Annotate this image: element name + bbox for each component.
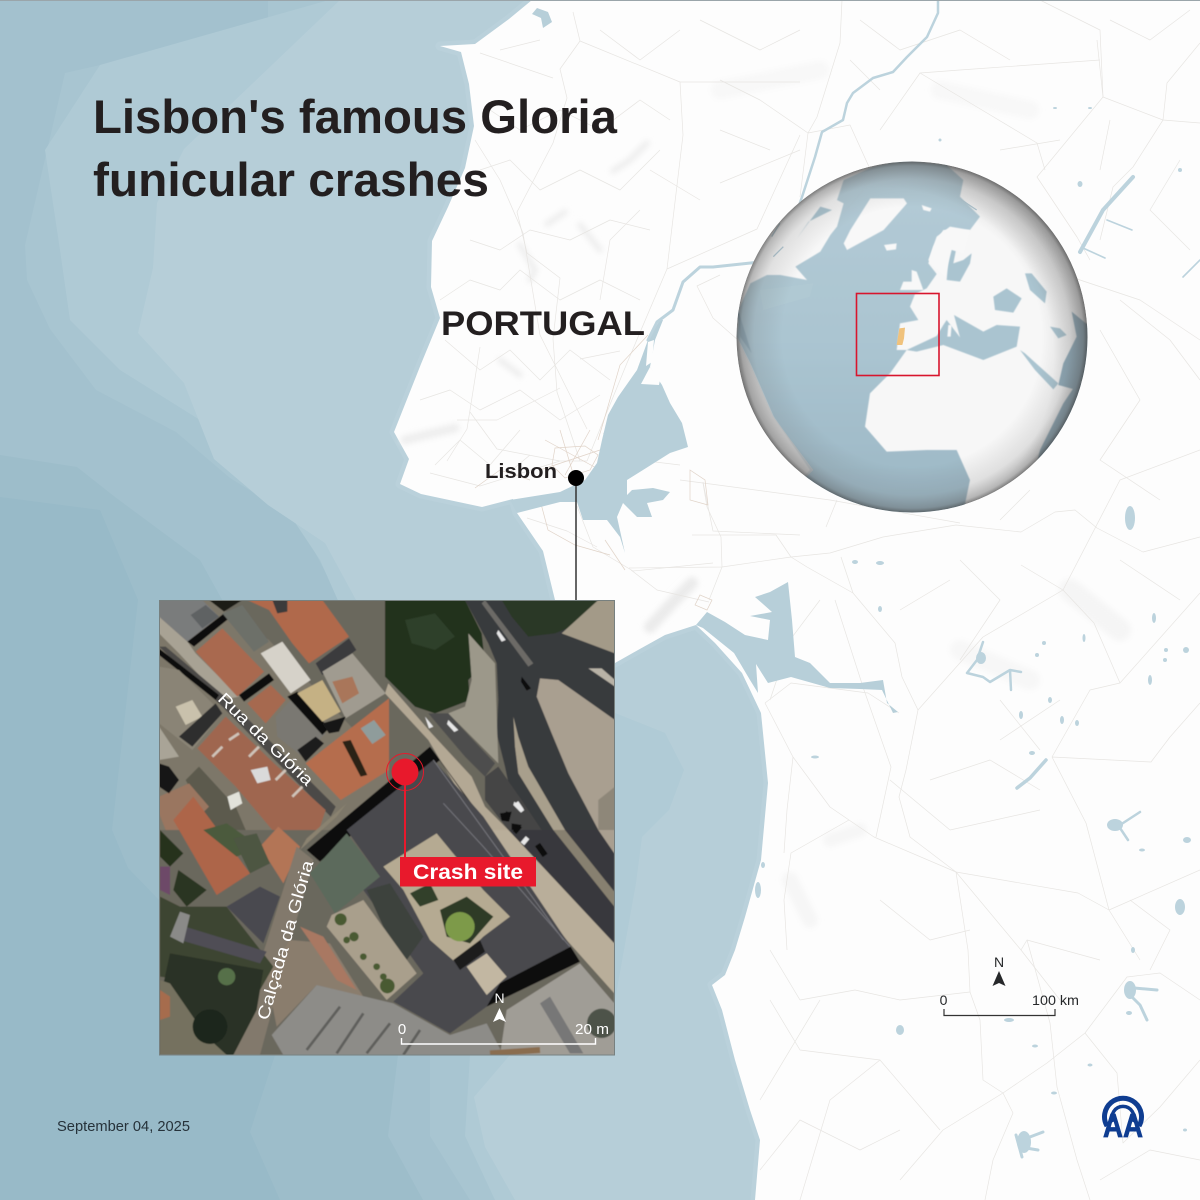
Anadolu Agency logo	[1103, 1098, 1143, 1144]
Anadolu Agency logo: AA	[1103, 1107, 1143, 1144]
title	[93, 90, 618, 206]
faint road network	[420, 0, 1200, 1200]
locator rectangle	[856, 294, 939, 376]
main map north arrow: N	[994, 954, 1004, 970]
main map scale bar: 0	[940, 992, 948, 1008]
shelf highlights	[760, 283, 813, 310]
courtyard	[383, 833, 510, 963]
inset satellite map	[159, 600, 616, 1055]
sidewalk by building	[482, 830, 614, 993]
green roof	[310, 833, 380, 913]
crash site marker	[386, 754, 424, 860]
main map scale bar: 100 km	[1032, 992, 1079, 1008]
label: PORTUGAL: PORTUGAL	[441, 305, 645, 343]
Calcada street	[232, 847, 313, 1055]
lower right block	[500, 963, 614, 1055]
globe: Portugal highlight	[897, 328, 905, 345]
estuaries and rivers	[510, 8, 898, 713]
title: Lisbon's famous Gloria	[93, 90, 618, 143]
continuation of main road below plaza	[508, 830, 614, 943]
street label: Rua da Gloria: Rua da Glória	[214, 689, 318, 790]
Lisbon urban roads	[475, 335, 712, 610]
locator globe	[730, 160, 1100, 520]
title: funicular crashes	[93, 153, 489, 206]
inset scale bar: 20 m	[575, 1021, 609, 1038]
land: Portugal and Spain	[394, 0, 1200, 1200]
dark building roof	[347, 760, 571, 1033]
estuary islands	[641, 340, 660, 385]
globe land masses over ocean	[844, 198, 970, 337]
lower left: roofs	[173, 797, 250, 895]
Lisbon pointer: dot and leader line	[568, 470, 584, 600]
label: Lisbon: Lisbon	[485, 461, 557, 483]
globe oceans and seas	[730, 160, 1100, 520]
crash site label: Crash site	[413, 861, 523, 884]
parked cars	[514, 801, 529, 845]
large grey roof	[272, 985, 503, 1055]
inset north arrow: N	[494, 990, 505, 1006]
lower left buildings and trees	[160, 897, 273, 990]
relief shading	[405, 70, 1120, 920]
upper right: trees, roads and plaza	[385, 600, 615, 830]
main map scale bar	[940, 992, 1079, 1016]
street label: Calcada da Gloria: Calçada da Glória	[254, 858, 318, 1022]
main map north arrow	[992, 954, 1006, 986]
crash site label	[400, 857, 536, 886]
black shadow street	[307, 747, 440, 862]
inset scale bar	[398, 1021, 609, 1044]
lower courtyard with trees	[327, 900, 417, 1000]
inset scale bar: 0	[398, 1021, 406, 1038]
continuation of tram median	[553, 830, 614, 907]
inset north arrow	[493, 990, 506, 1022]
top edge line	[0, 0, 1200, 1]
upper left: roofs and streets	[159, 600, 389, 830]
date: September 04, 2025	[57, 1119, 190, 1135]
